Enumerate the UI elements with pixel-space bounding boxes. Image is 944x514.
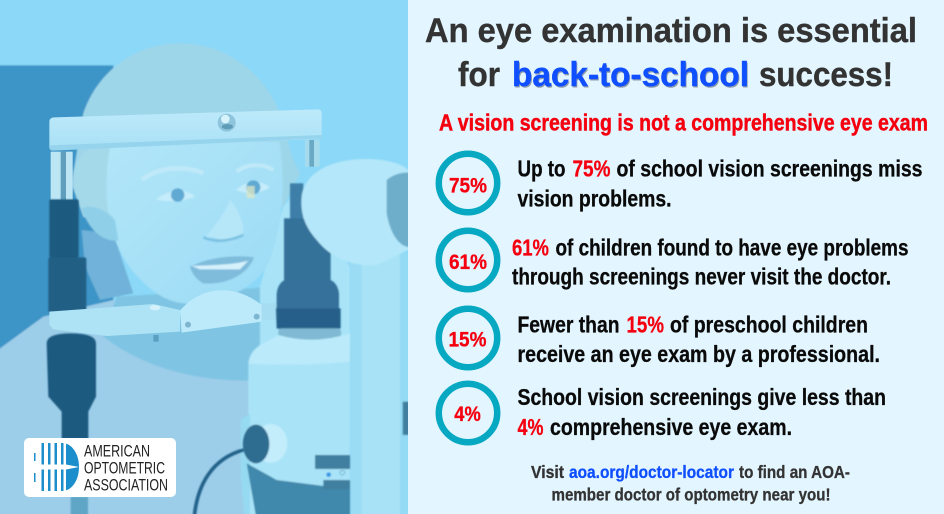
stat text 15%: Fewer than (518, 312, 620, 338)
footer call to action: to find an AOA- (739, 462, 850, 482)
stat text 61% (512, 234, 908, 290)
left dark column (47, 199, 96, 514)
footer call to action: Visit (531, 462, 564, 482)
photo: girl at slit lamp with blue tint (0, 0, 408, 514)
logo wordmark: ASSOCIATION (84, 476, 168, 494)
title: back-to-school (512, 56, 749, 94)
hair (73, 43, 300, 207)
face details (142, 165, 273, 284)
stat text 4%: School vision screenings give less than (518, 384, 886, 410)
stat text 15% (518, 312, 880, 367)
stat 2: 61% (439, 231, 908, 290)
stat text 15%: of preschool children (670, 312, 868, 338)
logo wordmark: OPTOMETRIC (84, 458, 165, 478)
stat text 15%: 15% (626, 312, 664, 338)
logo wordmark (84, 442, 168, 494)
stat ring 61%: 61% (449, 251, 487, 274)
stat ring 15% (439, 309, 497, 367)
logo wordmark: AMERICAN (84, 442, 150, 460)
stat ring 61% (439, 231, 497, 289)
shirt (0, 300, 260, 514)
stat text 4% (518, 384, 886, 440)
logo: American Optometric Association (24, 438, 176, 497)
stat 4: 4% (439, 384, 886, 442)
head frame (49, 109, 322, 200)
slit lamp base (194, 333, 350, 514)
title: for (458, 56, 500, 94)
title (425, 12, 917, 96)
stat text 15%: receive an eye exam by a professional. (518, 341, 880, 367)
stat text 4%: comprehensive eye exam. (550, 414, 792, 440)
footer call to action: aoa.org/doctor-locator (569, 462, 734, 482)
face (107, 142, 283, 304)
stat ring 4% (439, 384, 497, 442)
stat ring 75%: 75% (449, 174, 487, 198)
stat text 75%: 75% (572, 156, 610, 182)
stat 3: 15% (439, 309, 880, 367)
ear (82, 207, 118, 241)
icon: striped eye mark (34, 443, 80, 491)
chin rest (49, 290, 278, 342)
stat ring 75% (439, 154, 497, 212)
footer call to action: member doctor of optometry near you! (552, 484, 830, 504)
stat text 4%: 4% (518, 414, 544, 440)
stat ring 4%: 4% (454, 403, 481, 426)
title: An eye examination is essential (425, 12, 917, 50)
stat 1: 75% (439, 154, 922, 212)
right panel background (408, 0, 944, 514)
slit lamp lens arm (276, 159, 413, 514)
footer call to action (531, 462, 850, 504)
title: back-to-school (513, 58, 750, 96)
stat text 75% (518, 156, 922, 212)
stat text 75%: vision problems. (518, 186, 672, 212)
stat text 61%: 61% (512, 234, 549, 260)
neck (103, 287, 277, 381)
stat ring 15%: 15% (448, 328, 487, 352)
stat text 75%: Up to (518, 156, 566, 182)
title: success! (759, 56, 893, 94)
